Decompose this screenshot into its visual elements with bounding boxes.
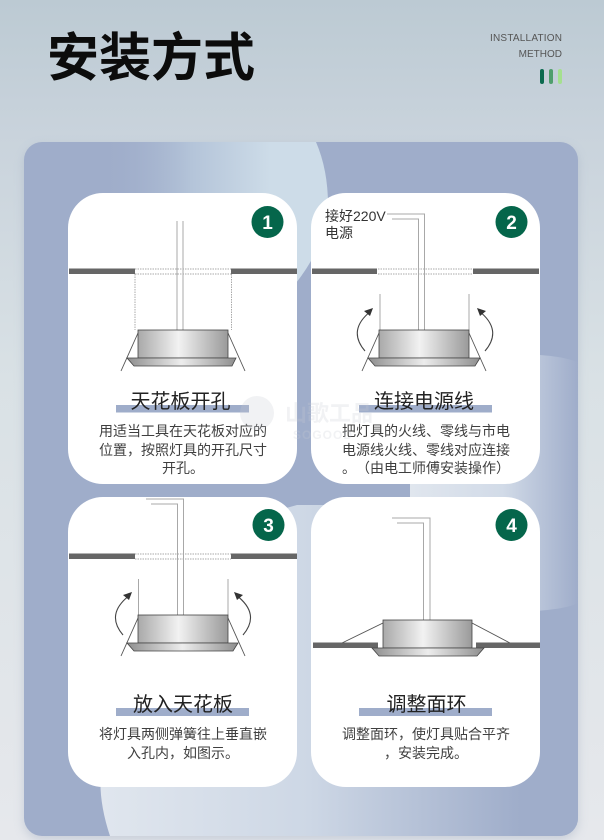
description: 电源线火线、零线对应连接 — [342, 442, 510, 458]
heading: 调整面环 — [386, 693, 466, 716]
heading: 连接电源线 — [374, 390, 474, 413]
panel: blue background — [24, 142, 578, 840]
diagram: insert into ceiling — [69, 499, 297, 656]
step badge 1 — [252, 206, 284, 238]
watermark: 山歌工品 — [285, 401, 373, 426]
description: 将灯具两侧弹簧往上垂直嵌 — [99, 726, 267, 742]
diagram: wiring — [312, 214, 539, 371]
description: 入孔内，如图示。 — [127, 745, 239, 761]
description: 用适当工具在天花板对应的 — [99, 423, 267, 439]
description — [99, 423, 267, 476]
step badge 4 — [496, 509, 528, 541]
watermark — [240, 396, 373, 442]
description — [342, 423, 510, 476]
description: 调整面环，使灯具贴合平齐 — [342, 726, 510, 742]
voltage label: 电源 — [325, 225, 353, 241]
voltage label: 接好220V — [325, 208, 386, 224]
heading: 天花板开孔 — [130, 390, 230, 413]
english subtitle: METHOD — [519, 49, 562, 60]
card 2 — [311, 193, 540, 484]
description: 把灯具的火线、零线与市电 — [342, 423, 510, 439]
card 4 — [311, 497, 540, 787]
english subtitle — [490, 33, 562, 60]
card 1 — [68, 193, 297, 484]
icon: three green bars — [540, 69, 562, 84]
heading: 放入天花板 — [133, 693, 233, 716]
description: 位置，按照灯具的开孔尺寸 — [99, 442, 267, 458]
english subtitle: INSTALLATION — [490, 33, 562, 44]
description — [99, 726, 267, 761]
watermark: SOGOOD — [293, 428, 353, 442]
card 3 — [68, 497, 297, 787]
step badge 2: 2 — [506, 213, 517, 234]
description: 。（由电工师傅安装操作） — [342, 460, 510, 476]
step badge 3: 3 — [263, 516, 274, 537]
diagram: ceiling cut — [69, 221, 297, 371]
step badge 3 — [252, 509, 284, 541]
step badge 2 — [496, 206, 528, 238]
heading — [359, 693, 492, 716]
title: 安装方式 — [47, 30, 255, 88]
step badge 1: 1 — [262, 213, 273, 234]
diagram: adjust ring — [313, 518, 540, 656]
description — [342, 726, 510, 761]
voltage label — [325, 208, 386, 241]
description: 开孔。 — [162, 460, 204, 476]
step badge 4: 4 — [506, 516, 517, 537]
description: ，安装完成。 — [384, 745, 468, 761]
